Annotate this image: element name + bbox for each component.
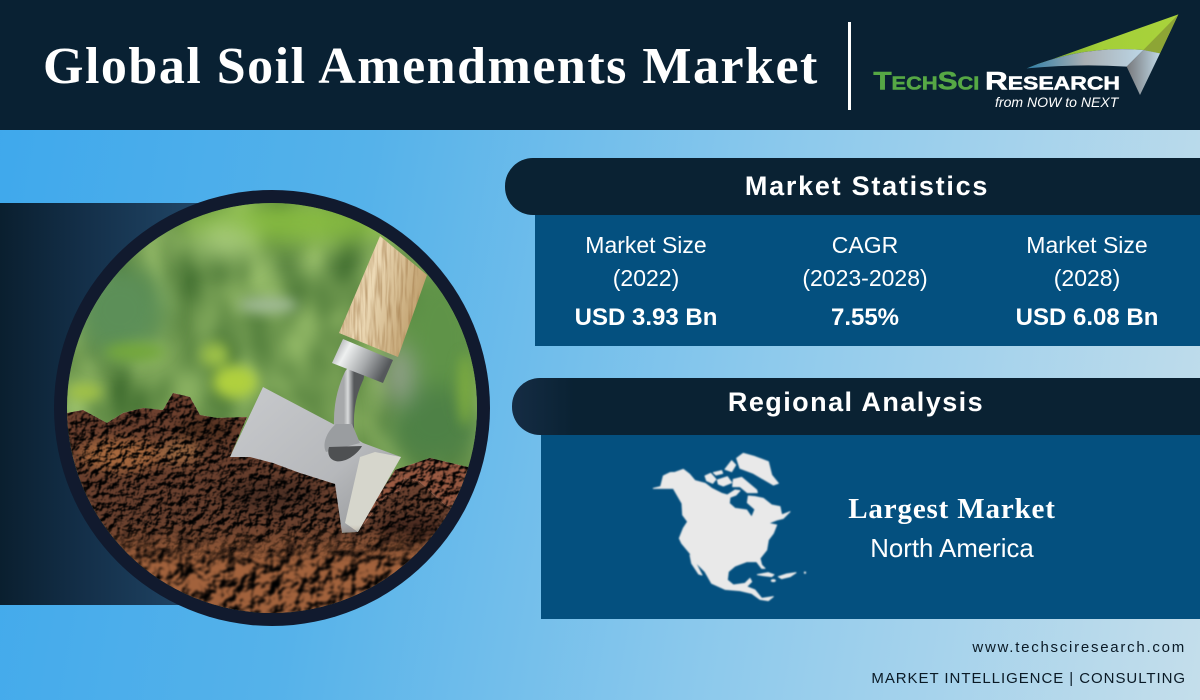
photo: trowel in soil [54,190,490,626]
photo frame ring [54,190,490,626]
website url: www.techsciresearch.com [972,639,1186,656]
stat: CAGR: CAGR [832,232,898,258]
stat: CAGR [802,232,928,331]
trowel neck [344,376,354,440]
market statistics heading pill [505,158,1200,215]
left dark band behind photo [0,203,220,605]
blurred green background [60,200,490,620]
logo: TechSci Research [873,14,1178,110]
market statistics heading pill: Market Statistics [745,171,989,201]
panel: regional analysis [541,435,1200,619]
logo: TechSci Research: RESEARCH [985,68,1120,95]
stat: CAGR: (2023-2028) [802,265,928,291]
logo: TechSci Research: TECHSCI [873,68,979,95]
title: Global Soil Amendments Market [43,38,819,95]
trowel ferrule [332,339,393,383]
soil behind trowel, right side [358,458,468,569]
regional analysis heading pill: Regional Analysis [728,387,984,417]
text: largest market: North America [870,535,1034,563]
tagline: MARKET INTELLIGENCE | CONSULTING [871,670,1186,687]
stat: market size 2028: USD 6.08 Bn [1016,304,1158,331]
stat: market size 2028 [1016,232,1158,331]
logo: TechSci Research: from NOW to NEXT [995,94,1120,110]
header divider [848,22,851,110]
icon: North America map [652,452,807,602]
stat: market size 2028: Market Size [1026,232,1148,258]
trowel wooden handle [339,236,427,357]
stat: market size 2022 [575,232,717,331]
panel: market statistics [535,215,1200,346]
text: largest market [848,493,1056,563]
stat: CAGR: 7.55% [831,304,899,331]
stat: market size 2028: (2028) [1054,265,1120,291]
front soil lumps [106,526,438,613]
stat: market size 2022: (2022) [613,265,679,291]
regional analysis heading pill [512,378,1200,435]
header band [0,0,1200,130]
text: largest market: Largest Market [848,493,1056,525]
stat: market size 2022: USD 3.93 Bn [575,304,717,331]
trowel blade [230,387,401,533]
soil mound [67,393,451,613]
stat: market size 2022: Market Size [585,232,707,258]
